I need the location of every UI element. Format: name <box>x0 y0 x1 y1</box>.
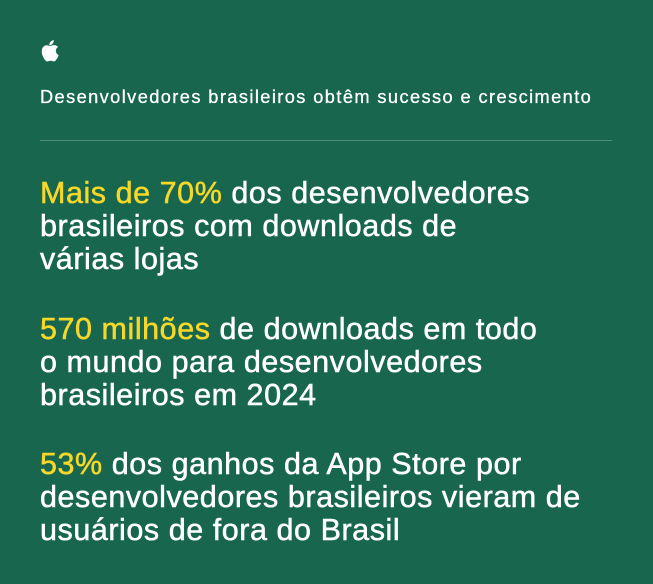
stat 2 <box>40 312 537 412</box>
stat 3: desenvolvedores brasileiros vieram de <box>40 480 581 514</box>
stat 1: várias lojas <box>40 242 199 276</box>
stat 2: o mundo para desenvolvedores <box>40 345 483 379</box>
stat 1 <box>40 176 530 276</box>
stat 1: Mais de 70% dos desenvolvedores <box>40 176 530 210</box>
stat 1: brasileiros com downloads de <box>40 209 457 243</box>
stat 2: brasileiros em 2024 <box>40 378 317 412</box>
subtitle: Desenvolvedores brasileiros obtêm sucesso e crescimento <box>40 87 592 107</box>
stat 3 <box>40 447 581 547</box>
stat 3: 53% dos ganhos da App Store por <box>40 447 522 481</box>
icon: apple logo <box>42 40 59 62</box>
stat 2: 570 milhões de downloads em todo <box>40 312 537 346</box>
stat 3: usuários de fora do Brasil <box>40 513 400 547</box>
